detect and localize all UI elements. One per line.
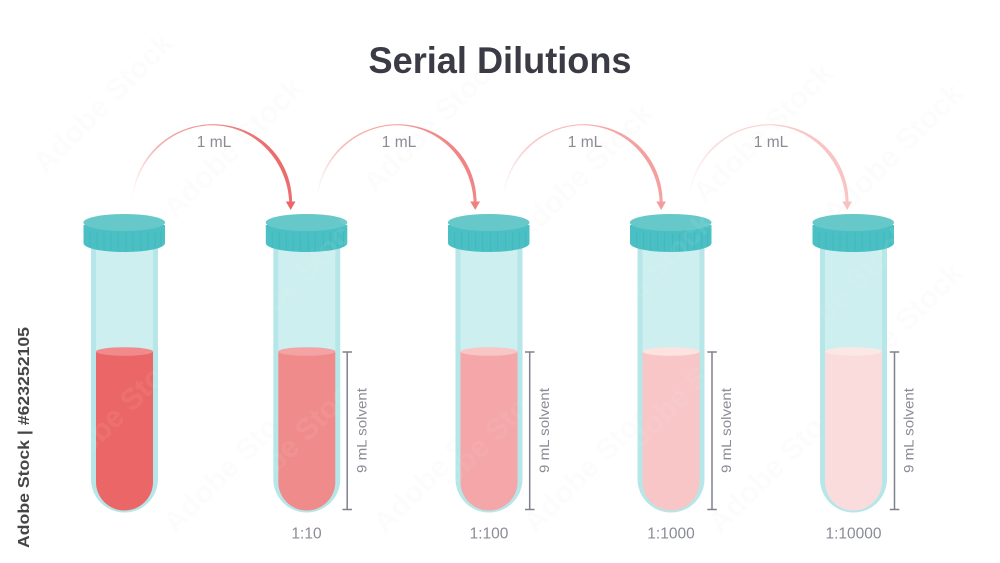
label: 1 mL: 1 mL <box>568 134 603 151</box>
bracket: 9 mL solvent, tube 3 <box>525 352 552 510</box>
faint watermark over tubes: Adobe Stock <box>607 317 760 470</box>
arrow: transfer from 1:10 to 1:100 <box>317 124 480 210</box>
faint watermark over tubes: Adobe Stock <box>567 207 720 360</box>
bracket: 9 mL solvent, tube 3: 9 mL solvent <box>536 388 552 473</box>
arrow: transfer from stock to 1:10 <box>132 124 296 210</box>
bracket: 9 mL solvent, tube 5 <box>890 352 916 510</box>
test tube: 1:1000 <box>630 214 712 512</box>
dilution label: 1:100: 1:100 <box>470 526 509 542</box>
bracket: 9 mL solvent, tube 4 <box>707 352 734 510</box>
faint watermark over tubes: Adobe Stock <box>407 367 560 520</box>
bracket: 9 mL solvent, tube 2: 9 mL solvent <box>354 388 370 473</box>
arrow: transfer from 1:1000 to 1:10000 <box>689 124 852 210</box>
arrow: transfer from 1:100 to 1:1000 <box>503 124 666 210</box>
faint watermark over tubes: Adobe Stock <box>42 337 195 490</box>
label: 1 mL: 1 mL <box>197 134 232 151</box>
faint watermark over tubes: Adobe Stock <box>217 207 370 360</box>
dilution label: 1:1000: 1:1000 <box>647 526 695 542</box>
test tube: 1:100 <box>448 214 530 512</box>
label: 1 mL: 1 mL <box>382 134 417 151</box>
test tube: 1:10000 <box>812 214 894 512</box>
bracket: 9 mL solvent, tube 4: 9 mL solvent <box>718 388 734 473</box>
bracket: 9 mL solvent, tube 2 <box>342 352 370 510</box>
label: 1 mL: 1 mL <box>754 134 789 151</box>
stock credit: Adobe Stock | #623252105 <box>16 327 33 548</box>
test tube: stock solution <box>83 214 165 512</box>
faint watermark over tubes <box>42 207 920 520</box>
test tube: 1:10 <box>266 214 347 512</box>
dilution label: 1:10000: 1:10000 <box>825 526 882 542</box>
dilution label: 1:10: 1:10 <box>291 526 322 542</box>
faint watermark over tubes: Adobe Stock <box>217 367 370 520</box>
title: Serial Dilutions <box>368 40 632 81</box>
faint watermark over tubes: Adobe Stock <box>767 217 920 370</box>
bracket: 9 mL solvent, tube 5: 9 mL solvent <box>900 388 916 473</box>
